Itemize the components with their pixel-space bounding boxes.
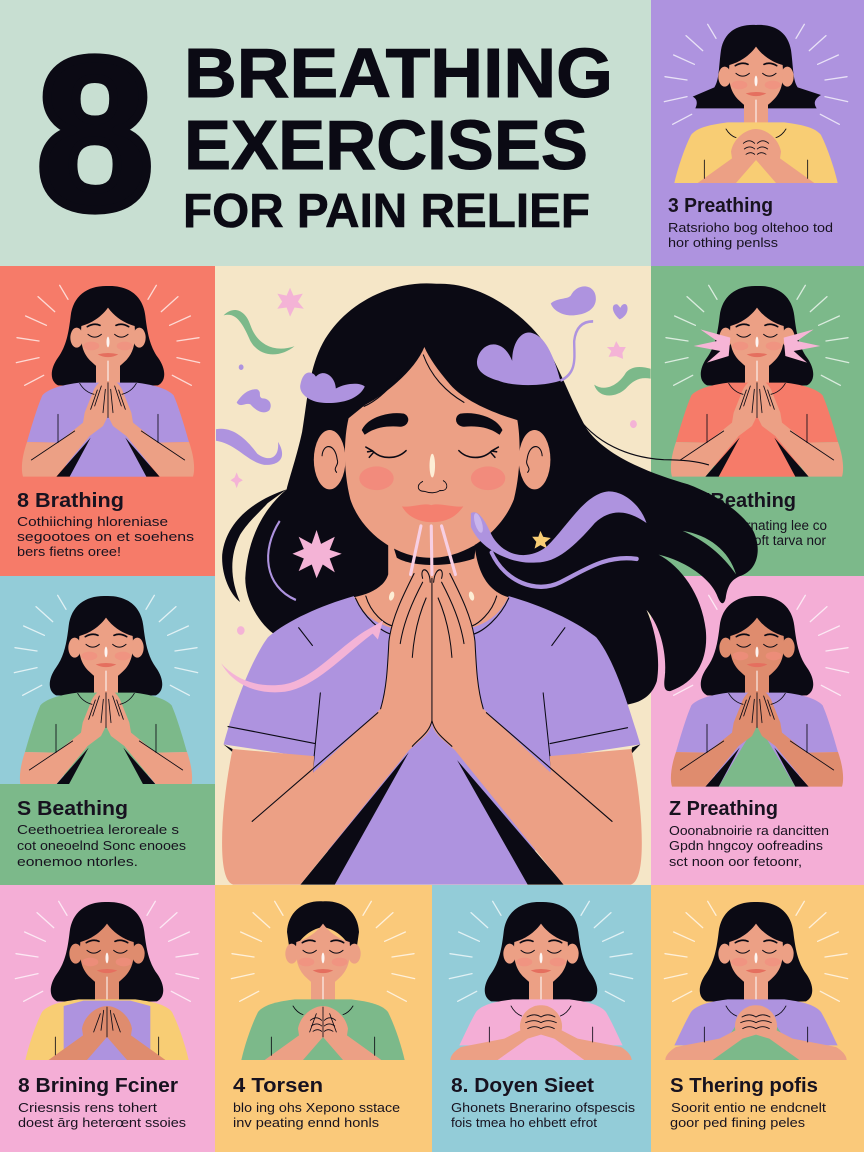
bottom teal heading: 8. Doyen Sieet [451,1075,594,1097]
bottom right heading: S Thering pofis [670,1075,818,1097]
icon: pink panel person [665,595,849,787]
bottom orange heading: 4 Torsen [233,1075,323,1097]
left arm and hand [222,567,432,885]
yellow star [532,531,551,549]
hand outlines [252,570,612,821]
right arm and hand [432,567,642,885]
title heading: FOR PAIN RELIEF [183,185,590,238]
face [345,347,520,558]
teal panel heading: S Beathing [17,798,128,820]
icon: bottom pink person [15,901,199,1060]
panel: pink exercise Z [651,576,864,885]
panel: coral exercise 8 [0,266,215,576]
bottom right text: Soorit entio ne endcnelt [671,1101,827,1115]
panel: bottom right orange exercise [651,885,864,1152]
panel: green exercise Breathing [651,266,864,576]
panel: teal and green exercise S [0,576,215,885]
bottom teal text: fois tmea ho ehbett efrot [451,1116,598,1130]
arc on hair [268,521,296,600]
icon: teal panel person [14,595,198,787]
purple panel text [668,221,833,250]
bottom orange text: blo ing ohs Xepono sstace [233,1101,400,1115]
teal panel text: Ceethoetriea leroreale s [17,823,179,837]
panel: bottom orange exercise 4 [215,885,432,1152]
shirt [224,596,640,885]
coral panel text [17,515,194,559]
hair clouds [300,332,560,403]
purple breath ribbon [471,491,646,587]
green panel heading: 7 EBeathing [680,490,796,512]
green panel text [707,518,827,548]
purple panel heading: 3 Preathing [668,195,773,217]
bottom pink text [18,1101,186,1130]
coral panel text: Cothiiching hloreniase [17,515,168,529]
icon: bottom teal person [449,901,633,1060]
bottom pink text: Criesnsis rens tohert [18,1101,158,1115]
collar highlights [388,591,475,601]
breath lines [411,526,455,574]
neck [354,543,509,645]
ribbon from hair cloud [560,321,593,381]
pink panel text: Ooonabnoirie ra dancitten [669,824,829,838]
bottom right text: goor ped fining peles [670,1116,805,1130]
chin shadow [393,545,476,565]
green panel text: Coalternating lee co [707,518,827,533]
icon: bottom right person [664,901,848,1060]
panel: bottom teal exercise [432,885,651,1152]
bottom orange text [233,1101,400,1130]
hair [222,283,758,705]
title heading: BREATHING [184,34,613,112]
central illustration: breathing girl [216,283,758,885]
bottom pink text: doest ārg heterœnt ssoies [18,1116,186,1130]
title heading: EXERCISES [184,106,588,184]
panel: bottom pink exercise [0,885,215,1152]
pink star on hair [292,530,342,578]
coral panel heading: 8 Brathing [17,490,124,512]
teal panel text: cot oneoelnd Sonc enooes [17,839,186,853]
icon: green panel person [665,285,849,477]
panel: title background [0,0,651,266]
pink arrow [221,621,383,692]
panel: central cream background [215,266,651,885]
panel: purple exercise 3 [651,0,864,266]
icon: purple panel person [664,24,848,183]
title numeral: 8 [37,13,153,254]
background decorations [216,286,651,635]
bottom teal text: Ghonets Bnerarino ofspescis [451,1101,635,1115]
bottom teal text [451,1101,635,1130]
pink panel heading: Z Preathing [669,798,778,820]
bottom right text [670,1101,827,1130]
ears [314,430,550,489]
pink panel text: Gpdn hngcoy oofreadins [669,839,823,853]
coral panel text: bers fietns oree! [17,545,121,559]
teal panel text: eonemoo ntorles. [17,855,138,869]
title heading [183,34,613,238]
pink panel text [669,824,829,869]
coral panel text: segootoes on et soehens [17,530,194,544]
green panel text: Sosoft tarva nor [731,533,826,548]
teal panel text [17,823,186,869]
icon: short haired person [231,901,415,1060]
icon: coral panel person [16,285,200,477]
bottom pink heading: 8 Brining Fciner [18,1075,178,1097]
pink panel text: sct noon oor fetoonr, [669,855,802,869]
purple panel text: Ratsrioho bog oltehoo tod [668,221,833,235]
purple panel text: hor othing penlss [668,236,778,250]
bottom orange text: inv peating ennd honls [233,1116,379,1130]
